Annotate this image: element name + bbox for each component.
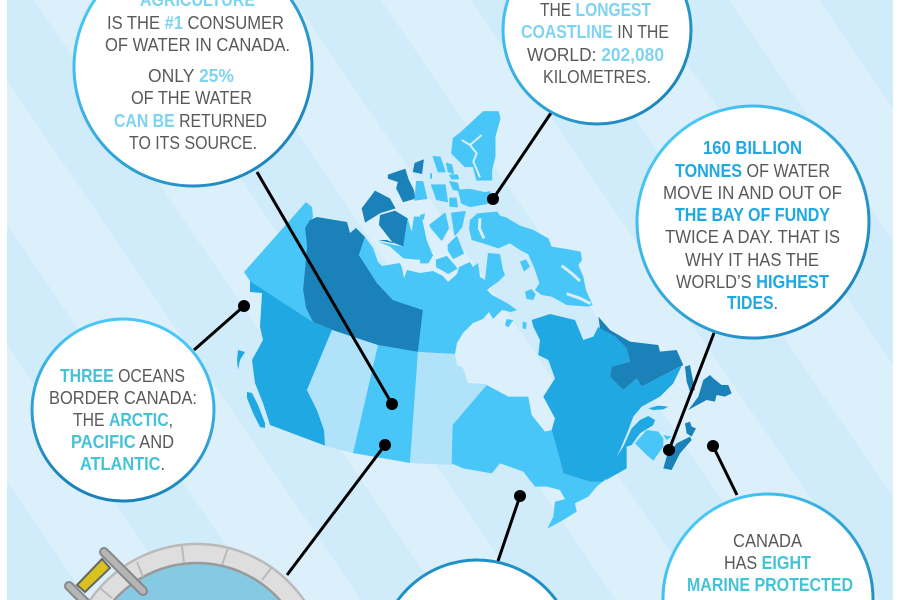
Northwest Territories	[303, 217, 423, 352]
callout: Bay of Fundy tides: TWICE A DAY. THAT IS	[665, 227, 840, 247]
Ontario	[452, 385, 604, 529]
connector: pool to Saskatchewan	[287, 439, 391, 575]
connector: coastline to Arctic	[487, 113, 551, 205]
central Arctic islands and Baffin Island	[420, 212, 593, 329]
callout: longest coastline: WORLD: 202,080	[527, 45, 664, 65]
callout: Bay of Fundy tides: WHY IT HAS THE	[685, 250, 819, 270]
callout: Bay of Fundy tides: MOVE IN AND OUT OF	[663, 183, 842, 203]
callout: longest coastline: KILOMETRES.	[543, 67, 651, 87]
pool ladder	[69, 552, 143, 600]
callout: agriculture	[74, 0, 312, 186]
northern Arctic islands	[388, 112, 500, 207]
illustration: swimming pool	[67, 544, 327, 600]
map of Canada	[237, 112, 732, 529]
callout: Bay of Fundy tides: TIDES.	[727, 293, 778, 313]
callout: agriculture: OF THE WATER	[131, 88, 252, 108]
pool water	[86, 563, 308, 600]
Haida Gwaii	[237, 350, 245, 370]
Nunavut mainland	[359, 237, 517, 354]
British Columbia	[250, 281, 332, 446]
callout: bottom centre circle	[379, 560, 575, 600]
connector: tides to Bay of Fundy	[663, 333, 714, 456]
callout: marine protected areas: CANADA	[733, 531, 802, 551]
Labrador	[598, 317, 683, 390]
callout: agriculture: CAN BE RETURNED	[114, 111, 267, 131]
Manitoba	[410, 352, 487, 465]
callout: three oceans: ATLANTIC.	[80, 454, 165, 474]
callout: agriculture: IS THE #1 CONSUMER	[107, 13, 284, 33]
connector: bottom circle to Ontario	[498, 490, 526, 561]
Quebec	[532, 314, 682, 482]
callout: marine protected areas: HAS EIGHT	[724, 553, 811, 573]
callout: Bay of Fundy tides: 160 BILLION	[703, 138, 802, 158]
Yukon	[244, 202, 313, 322]
pool rim	[67, 544, 327, 600]
callout: marine protected areas: MARINE PROTECTED	[687, 575, 853, 595]
pool rim joints	[100, 546, 272, 598]
callout: agriculture: ONLY 25%	[148, 66, 234, 86]
Alberta	[307, 330, 378, 453]
callout: three oceans: THREE OCEANS	[60, 366, 185, 386]
Saskatchewan	[353, 345, 418, 463]
callout: three oceans: BORDER CANADA:	[49, 388, 197, 408]
Vancouver Island	[247, 392, 265, 428]
callout: Bay of Fundy tides	[637, 106, 869, 338]
Atlantic provinces	[635, 365, 732, 470]
callout: longest coastline	[503, 0, 691, 124]
callout: agriculture: OF WATER IN CANADA.	[105, 35, 290, 55]
connector: three oceans to Pacific	[194, 300, 250, 350]
callout: longest coastline: COASTLINE IN THE	[521, 22, 669, 42]
callout: three oceans: PACIFIC AND	[71, 432, 174, 452]
connector: marine areas to Atlantic	[707, 440, 737, 495]
callout: Bay of Fundy tides: WORLD’S HIGHEST	[676, 272, 829, 292]
callout: longest coastline: THE LONGEST	[540, 0, 651, 20]
western Arctic islands	[362, 191, 433, 260]
callout: marine protected areas	[663, 494, 873, 600]
callout: Bay of Fundy tides: THE BAY OF FUNDY	[675, 205, 830, 225]
callout: three oceans	[32, 319, 214, 501]
connector: agriculture to Saskatchewan	[257, 172, 398, 410]
callout: Bay of Fundy tides: TONNES OF WATER	[675, 161, 830, 181]
callout: agriculture: TO ITS SOURCE.	[129, 133, 257, 153]
callout: three oceans: THE ARCTIC,	[73, 410, 173, 430]
